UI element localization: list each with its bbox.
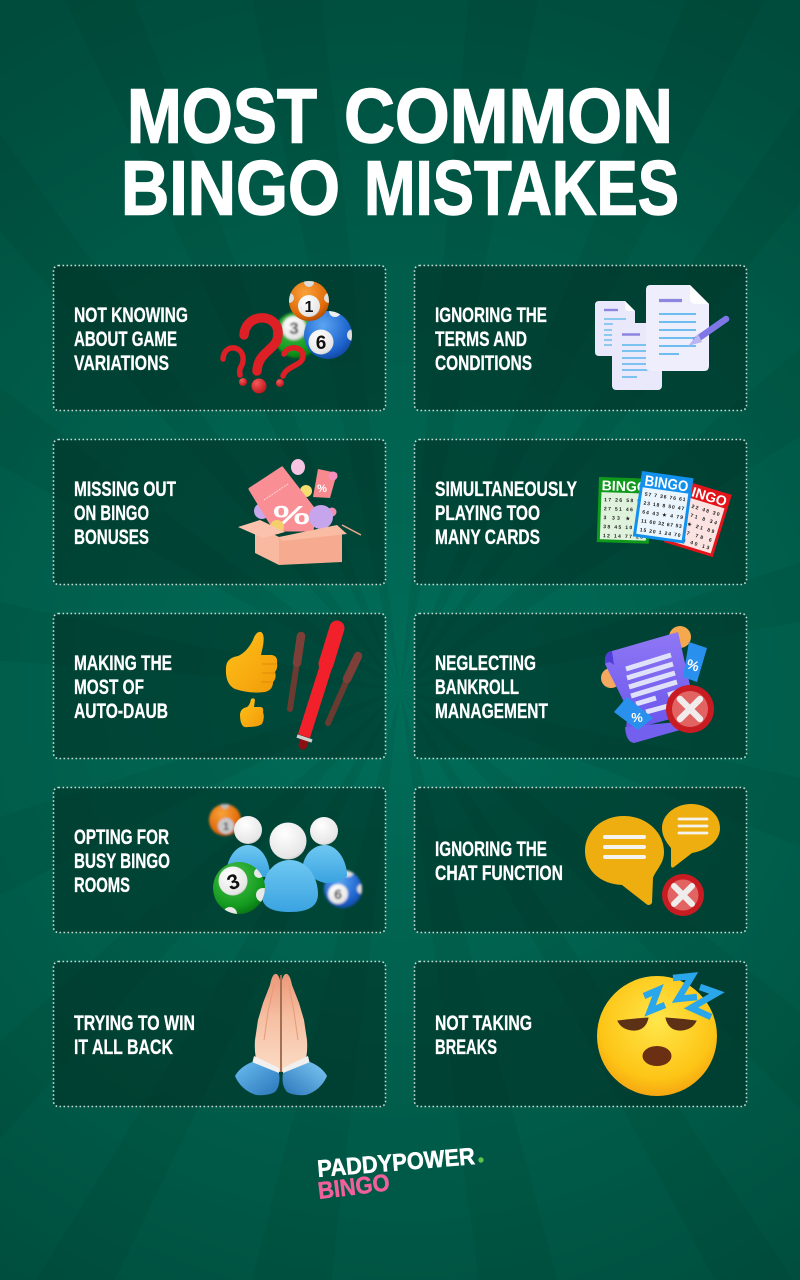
title: MISTAKES	[364, 146, 679, 232]
icon: three bingo cards: BINGO	[680, 481, 729, 509]
icon: gift box with coupons	[238, 459, 361, 565]
icon: sleeping face	[597, 976, 717, 1096]
panel: missing out on bingo bonuses: BONUSES	[74, 526, 149, 549]
panel: making the most of auto-daub: AUTO-DAUB	[74, 700, 168, 723]
panel: ignoring the terms and conditions: TERMS AND	[435, 328, 527, 351]
title	[121, 74, 679, 232]
icon: three bingo cards: BINGO	[601, 477, 648, 495]
icon: documents and pen	[595, 285, 726, 390]
icon: three bingo cards: 11 60 32 67 53	[641, 518, 682, 530]
panel: neglecting bankroll management	[414, 614, 746, 758]
logo: Paddy Power Bingo: PADDYPOWER	[316, 1143, 476, 1183]
icon: group of people with bingo balls	[209, 801, 367, 921]
logo: Paddy Power Bingo	[316, 1143, 484, 1205]
icon: three bingo cards: BINGO	[643, 473, 690, 496]
panel: neglecting bankroll management: NEGLECTING	[435, 652, 536, 675]
panel: ignoring the terms and conditions: CONDITIONS	[435, 352, 532, 375]
icon: group of people with bingo balls: 3	[224, 870, 243, 895]
icon: group of people with bingo balls: 6	[334, 886, 342, 902]
icon: three bingo cards: 27 51 46 56	[604, 506, 644, 514]
panel: trying to win it all back: IT ALL BACK	[74, 1036, 173, 1059]
icon: receipt, coupons and red cross: %	[631, 710, 643, 725]
panel: trying to win it all back: TRYING TO WIN	[74, 1012, 195, 1035]
panel: not taking breaks	[414, 962, 746, 1106]
icon: bingo balls and question marks: 6	[316, 333, 326, 354]
icon: bingo balls and question marks: 3	[289, 319, 299, 338]
icon: three bingo cards: 64 22 48 30	[680, 501, 720, 518]
panel: ignoring the terms and conditions	[414, 266, 746, 410]
panel: ignoring the chat function: CHAT FUNCTION	[435, 862, 563, 885]
icon: gift box with coupons: %	[317, 483, 327, 495]
icon: three bingo cards: 17 26 58 51	[604, 497, 644, 505]
icon: three bingo cards: 57 7 36 76 61	[644, 492, 686, 503]
panel: simultaneously playing too many cards	[414, 440, 746, 584]
icon: group of people with bingo balls: 1	[223, 821, 229, 833]
panel: opting for busy bingo rooms: OPTING FOR	[74, 826, 169, 849]
panel: neglecting bankroll management: BANKROLL	[435, 676, 519, 699]
icon: three bingo cards: 15 20 1 24 70	[639, 527, 681, 539]
icon: thumbs up and daubers	[226, 628, 358, 745]
title: COMMON	[344, 74, 673, 160]
panel: missing out on bingo bonuses	[54, 440, 386, 584]
panel: not knowing about game variations	[54, 266, 386, 410]
panel: trying to win it all back	[54, 962, 386, 1106]
panel: simultaneously playing too many cards: SIMULTANEOUSLY	[435, 478, 577, 501]
icon: three bingo cards: 23 18 8 50 47	[643, 501, 685, 512]
panel: opting for busy bingo rooms: BUSY BINGO	[74, 850, 170, 873]
panel: ignoring the chat function	[414, 788, 746, 932]
icon: three bingo cards: 38 45 10 37	[603, 524, 644, 532]
panel: simultaneously playing too many cards: MANY CARDS	[435, 526, 540, 549]
panel: not knowing about game variations: NOT KNOWING	[74, 304, 188, 327]
icon: three bingo cards: 3 33 ★ 24	[603, 515, 644, 523]
icon: receipt, coupons and red cross	[601, 626, 714, 743]
title: MOST	[127, 74, 317, 160]
icon: praying hands	[235, 974, 327, 1095]
title: BINGO	[121, 146, 340, 232]
icon: gift box with coupons: %	[273, 500, 310, 530]
icon: three bingo cards: 9 16 40 13	[670, 534, 710, 552]
panel: not knowing about game variations: VARIATIONS	[74, 352, 169, 375]
panel: missing out on bingo bonuses: MISSING OUT	[74, 478, 176, 501]
panel: ignoring the terms and conditions: IGNORING THE	[435, 304, 547, 327]
icon: receipt, coupons and red cross: %	[685, 655, 702, 675]
panel: opting for busy bingo rooms	[54, 788, 386, 932]
panel: missing out on bingo bonuses: ON BINGO	[74, 502, 149, 525]
logo: Paddy Power Bingo: BINGO	[316, 1169, 391, 1205]
icon: bingo balls and question marks: 1	[305, 299, 314, 316]
panel: opting for busy bingo rooms: ROOMS	[74, 874, 130, 897]
panel: not taking breaks: BREAKS	[435, 1036, 497, 1059]
panel: neglecting bankroll management: MANAGEMENT	[435, 700, 548, 723]
panel: not taking breaks: NOT TAKING	[435, 1012, 532, 1035]
icon: speech bubbles and red cross	[585, 804, 720, 916]
icon: three bingo cards: 10 ★ 21 89	[675, 518, 715, 535]
panel: simultaneously playing too many cards: PLAYING TOO	[435, 502, 540, 525]
panel: making the most of auto-daub: MOST OF	[74, 676, 144, 699]
icon: three bingo cards: 5 37 78 6	[672, 526, 713, 544]
panel: making the most of auto-daub	[54, 614, 386, 758]
icon: three bingo cards	[597, 471, 732, 557]
icon: three bingo cards: 12 14 77 28	[603, 533, 643, 541]
icon: three bingo cards: 64 43 ★ 4 79	[642, 509, 683, 521]
icon: three bingo cards: 53 71 8 34	[678, 509, 718, 527]
icon: bingo balls and question marks	[223, 277, 359, 394]
panel: ignoring the chat function: IGNORING THE	[435, 838, 547, 861]
panel: not knowing about game variations: ABOUT GAME	[74, 328, 177, 351]
panel: making the most of auto-daub: MAKING THE	[74, 652, 172, 675]
